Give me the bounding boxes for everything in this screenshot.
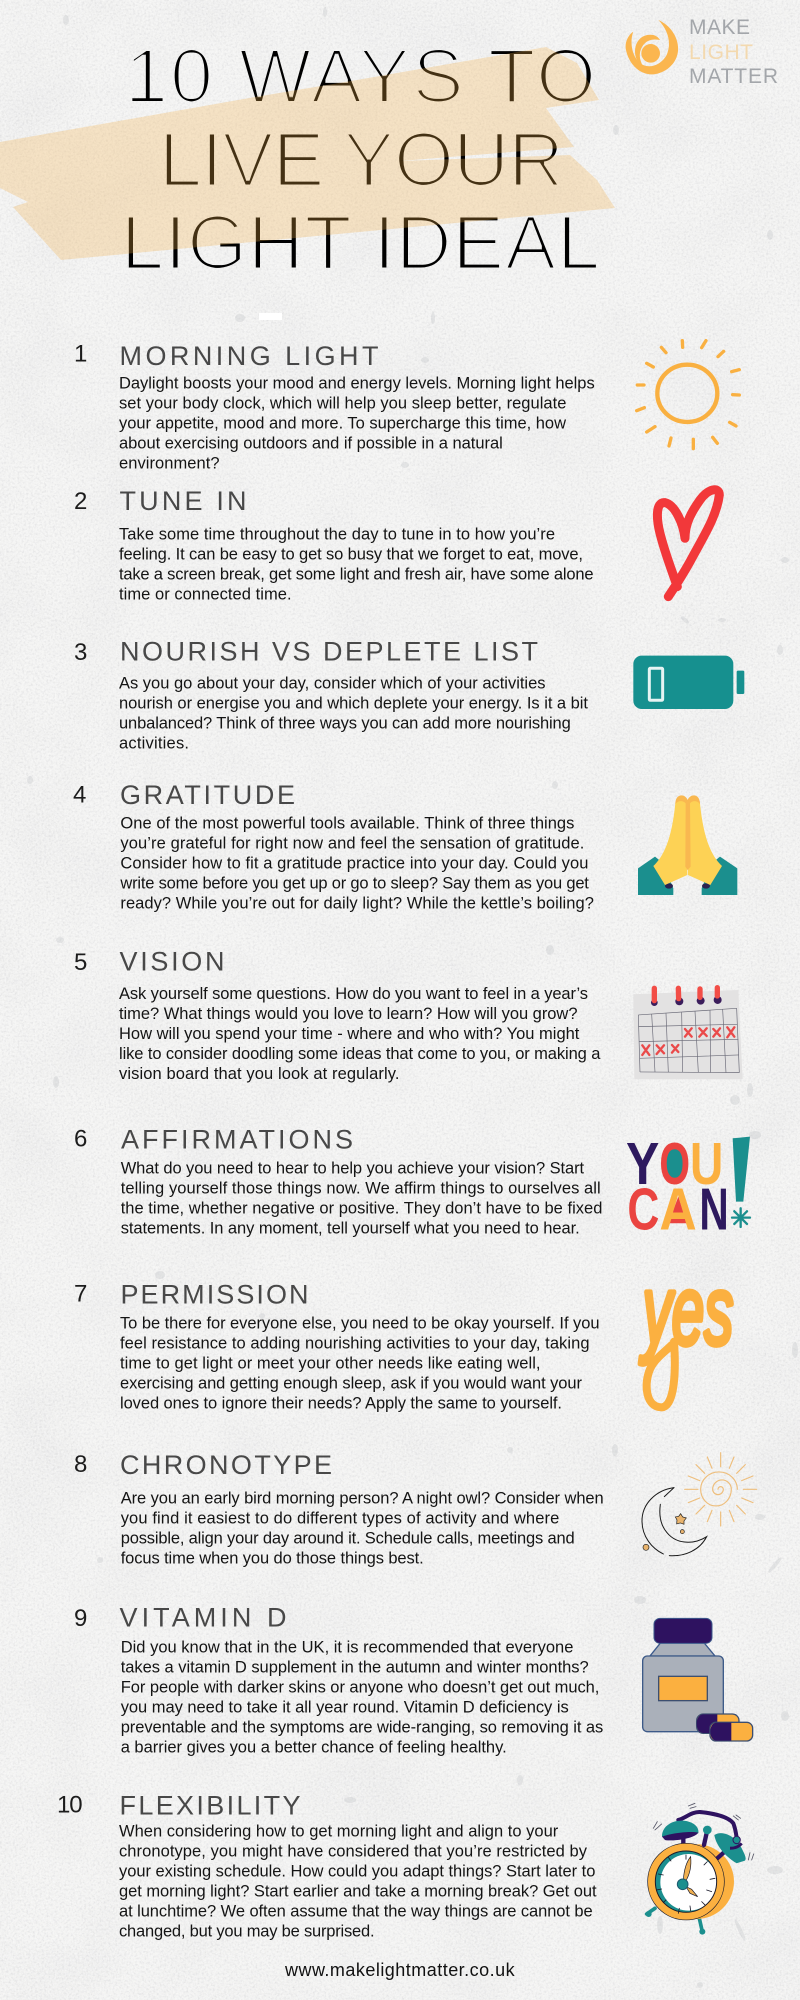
body text: feel resistance to adding nourishing activities to your day, taking [120, 1334, 590, 1352]
body text: focus time when you do those things best. [121, 1549, 424, 1567]
number 8: 8 [74, 1451, 87, 1478]
icon: praying hands [638, 795, 737, 895]
body text: a barrier gives you a better chance of feeling healthy. [121, 1738, 507, 1756]
body text: How will you spend your time - where and who with? You might [119, 1025, 580, 1043]
body text: at lunchtime? We often assume that the way things are cannot be [119, 1903, 593, 1921]
heading: MORNING LIGHT [120, 341, 378, 371]
icon: you can lettering: U [690, 1130, 723, 1197]
body text [121, 1159, 602, 1237]
body text: When considering how to get morning light and align to your [119, 1823, 559, 1841]
number 3: 3 [74, 639, 87, 666]
panel: step 8 chronotype [74, 1450, 757, 1567]
body text: chronotype, you might have considered that you’re restricted by [119, 1843, 588, 1861]
number 10: 10 [57, 1792, 83, 1819]
icon: you can lettering [626, 1130, 750, 1242]
icon: yes lettering [639, 1257, 733, 1407]
logo text: MATTER [689, 65, 778, 88]
body text [120, 1314, 600, 1412]
panel: step 10 flexibility [57, 1791, 754, 1941]
number 7: 7 [74, 1281, 87, 1308]
number 4: 4 [73, 782, 86, 809]
body text: changed, but you may be surprised. [119, 1923, 375, 1941]
body text: loved ones to ignore their needs? Apply the same to yourself. [120, 1394, 562, 1412]
body text [121, 1638, 603, 1756]
heading: TUNE IN [120, 486, 246, 516]
panel: step 7 permission [74, 1257, 733, 1412]
body text: write some before you get up or go to sleep? Say them as you get [119, 874, 589, 892]
icon: heart [657, 490, 719, 597]
icon: yes lettering: yes [639, 1257, 733, 1365]
body text: For people with darker skins or anyone who doesn’t get out much, [121, 1678, 599, 1696]
logo text: LIGHT [689, 41, 753, 64]
body text: feeling. It can be easy to get so busy that we forget to eat, move, [119, 545, 583, 563]
body text: To be there for everyone else, you need to be okay yourself. If you [120, 1314, 600, 1332]
title: 10 WAYS TO [125, 34, 596, 120]
logo text [689, 16, 778, 88]
body text: your existing schedule. How could you adapt things? Start later to [119, 1863, 595, 1881]
title [121, 34, 600, 286]
body text: possible, align your day around it. Schedule calls, meetings and [121, 1529, 575, 1547]
body text: One of the most powerful tools available. Think of three things [120, 814, 574, 832]
icon: you can lettering: Y [626, 1130, 659, 1197]
body text: take a screen break, get some light and fresh air, have some alone [119, 565, 594, 583]
heading: NOURISH VS DEPLETE LIST [120, 637, 538, 667]
title: LIGHT IDEAL [121, 200, 600, 286]
body text [121, 1489, 604, 1567]
body text: ready? While you’re out for daily light? While the kettle’s boiling? [120, 894, 594, 912]
body text: Did you know that in the UK, it is recommended that everyone [121, 1638, 573, 1656]
body text: takes a vitamin D supplement in the autumn and winter months? [121, 1658, 589, 1676]
logo text: MAKE [689, 16, 750, 39]
icon: you can lettering: A [659, 1175, 697, 1242]
body text: Ask yourself some questions. How do you want to feel in a year’s [119, 985, 588, 1003]
number 9: 9 [74, 1605, 87, 1632]
body text: unbalanced? Think of three ways you can add more nourishing [119, 714, 571, 732]
heading: FLEXIBILITY [120, 1791, 300, 1821]
heading: VITAMIN D [120, 1603, 286, 1633]
number 2: 2 [74, 488, 87, 515]
body text: environment? [119, 454, 220, 472]
body text: exercising and getting enough sleep, ask if you would want your [120, 1374, 582, 1392]
body text: set your body clock, which will help you sleep better, regulate [119, 394, 566, 412]
body text: you’re grateful for right now and feel the sensation of gratitude. [120, 834, 584, 852]
body text [119, 525, 594, 603]
body text: statements. In any moment, tell yourself what you need to hear. [121, 1219, 580, 1237]
body text: Take some time throughout the day to tune in to how you’re [119, 525, 555, 543]
body text [119, 985, 601, 1083]
heading: AFFIRMATIONS [121, 1125, 353, 1155]
number 6: 6 [74, 1126, 87, 1153]
logo: Make Light Matter [626, 16, 778, 88]
icon: you can lettering: N [699, 1175, 729, 1242]
body text: activities. [119, 734, 189, 752]
body text: Daylight boosts your mood and energy levels. Morning light helps [119, 374, 595, 392]
panel: step 3 nourish vs deplete list [74, 637, 744, 752]
number 5: 5 [74, 949, 87, 976]
panel: step 9 vitamin d [74, 1603, 753, 1756]
body text: telling yourself those things now. We affirm things to ourselves all [121, 1179, 601, 1197]
heading: CHRONOTYPE [120, 1450, 332, 1480]
heading: VISION [120, 947, 224, 977]
number 1: 1 [74, 341, 87, 368]
icon: alarm clock [646, 1803, 754, 1935]
brush stroke behind title [0, 47, 615, 260]
footer: website: www.makelightmatter.co.uk [284, 1960, 516, 1980]
body text [119, 674, 588, 752]
heading: PERMISSION [120, 1279, 308, 1309]
icon: battery [633, 656, 744, 709]
icon: logo swirl [626, 20, 678, 74]
body text: time or connected time. [119, 585, 292, 603]
title: LIVE YOUR [159, 117, 564, 203]
icon: calendar [633, 988, 743, 1079]
body text: time? What things would you love to learn? How will you grow? [119, 1005, 578, 1023]
icon: vitamin bottle and pills [643, 1618, 753, 1741]
panel: step 6 affirmations [74, 1125, 750, 1242]
body text: get morning light? Start earlier and take a morning break? Get out [119, 1883, 597, 1901]
body text: What do you need to hear to help you achieve your vision? Start [121, 1159, 585, 1177]
heading: GRATITUDE [120, 780, 295, 810]
body text [119, 1823, 597, 1941]
body text: preventable and the symptoms are wide-ranging, so removing it as [121, 1718, 603, 1736]
body text: the time, whether negative or positive. They don’t have to be fixed [121, 1199, 602, 1217]
icon: sun and moon [642, 1453, 757, 1556]
body text: vision board that you look at regularly. [119, 1065, 400, 1083]
body text: time to get light or meet your other needs like eating well, [120, 1354, 540, 1372]
body text: As you go about your day, consider which of your activities [119, 674, 546, 692]
icon: you can lettering: O [659, 1130, 690, 1197]
body text: you may need to take it all year round. Vitamin D deficiency is [121, 1698, 569, 1716]
body text: Are you an early bird morning person? A night owl? Consider when [121, 1489, 604, 1507]
body text: you find it easiest to do different types of activity and where [121, 1509, 559, 1527]
body text: your appetite, mood and more. To supercharge this time, how [119, 414, 566, 432]
body text [119, 814, 594, 912]
small white dash [259, 313, 282, 320]
body text [119, 374, 595, 472]
icon: sun [637, 341, 739, 449]
icon: you can lettering: C [627, 1175, 659, 1242]
panel: step 5 vision [74, 947, 743, 1083]
body text: about exercising outdoors and if possible in a natural [119, 434, 503, 452]
body text: Consider how to fit a gratitude practice into your day. Could you [120, 854, 588, 872]
body text: nourish or energise you and which deplete your energy. Is it a bit [119, 694, 588, 712]
panel: step 2 tune in [74, 486, 719, 603]
body text: like to consider doodling some ideas that come to you, or making a [119, 1045, 601, 1063]
panel: step 1 morning light [74, 341, 739, 472]
panel: step 4 gratitude [73, 780, 737, 912]
